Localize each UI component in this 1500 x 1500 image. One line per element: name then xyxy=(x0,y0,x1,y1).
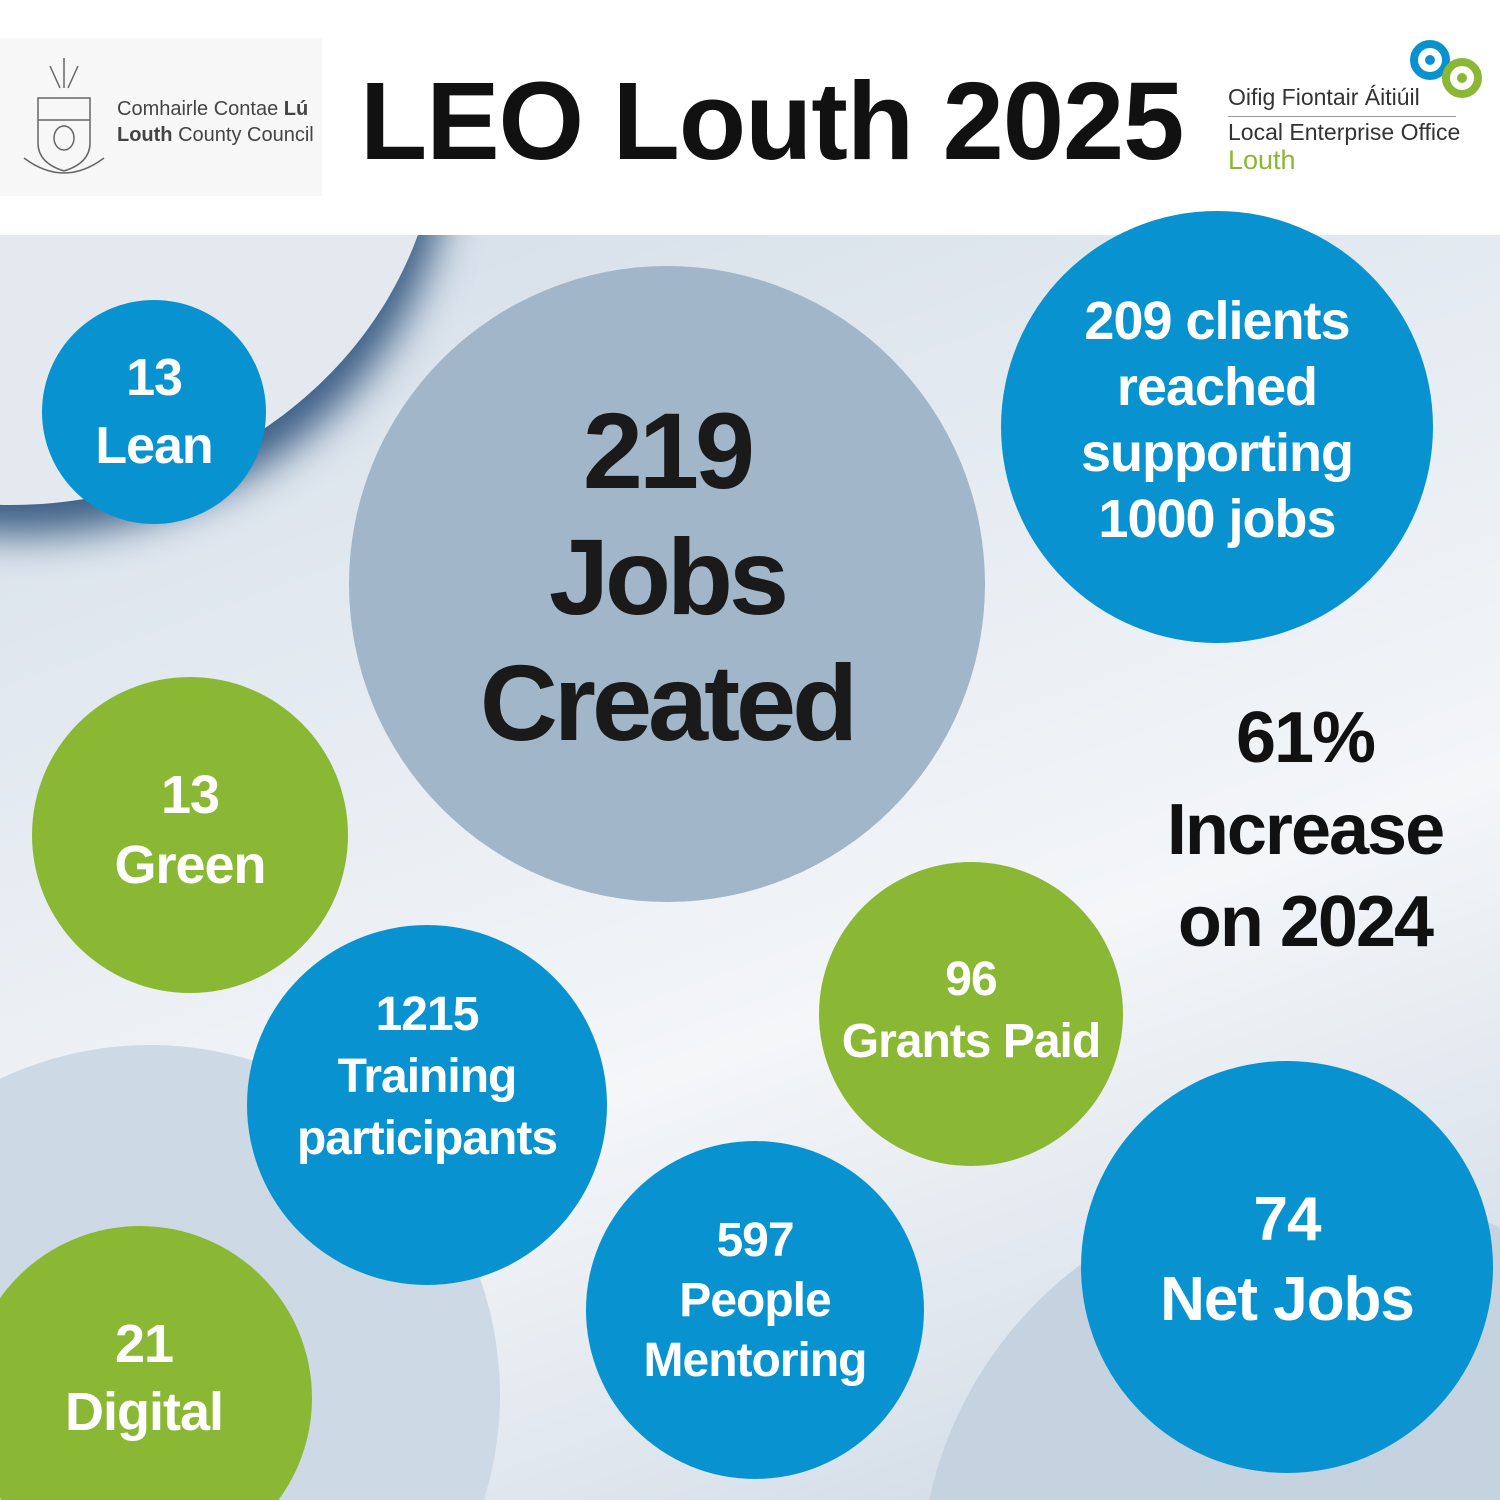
icon: LEO rings xyxy=(1410,40,1482,98)
circle: 1215 Training: Training xyxy=(338,1050,516,1103)
logo: Louth County Council: Comhairle Contae Lú xyxy=(117,98,308,120)
logo: Local Enterprise Office Louth: Local Enterprise Office xyxy=(1228,119,1460,145)
circle: 597 People Mentoring xyxy=(586,1141,924,1479)
logo: Local Enterprise Office Louth xyxy=(1228,40,1482,175)
circle: 74 Net Jobs: Net Jobs xyxy=(1160,1265,1414,1334)
circle: 13 Green: 13 xyxy=(161,765,219,825)
text: 61% increase: on 2024 xyxy=(1178,882,1432,962)
circle: 74 Net Jobs xyxy=(1081,1061,1493,1473)
circle: 219 Jobs Created: Created xyxy=(480,642,854,763)
logo: Local Enterprise Office Louth: Oifig Fiontair Áitiúil xyxy=(1228,84,1420,110)
circle: 21 Digital: Digital xyxy=(65,1382,223,1442)
circle: 21 Digital: 21 xyxy=(115,1314,173,1374)
circle: 1215 Training: 1215 xyxy=(376,988,478,1041)
circle: 209 clients: reached xyxy=(1117,357,1317,417)
circle: 219 Jobs Created xyxy=(349,266,985,902)
circle: 74 Net Jobs: 74 xyxy=(1254,1185,1320,1254)
circle: 13 Green: Green xyxy=(114,835,266,895)
circle: 209 clients: supporting xyxy=(1081,423,1353,483)
circle: 13 Lean: Lean xyxy=(95,417,213,475)
circle: 13 Green xyxy=(32,677,348,993)
circle: 219 Jobs Created: 219 xyxy=(583,390,751,511)
logo: Louth County Council xyxy=(0,38,322,196)
icon: crest xyxy=(24,58,104,174)
text: 61% increase xyxy=(1167,698,1443,962)
text: 61% increase: 61% xyxy=(1236,698,1374,778)
circle: 209 clients: 209 clients xyxy=(1084,291,1350,351)
circle: 597 People Mentoring: 597 xyxy=(716,1214,794,1267)
logo: Local Enterprise Office Louth: Louth xyxy=(1228,145,1296,175)
logo: Louth County Council: Louth County Council xyxy=(117,124,314,146)
title: LEO Louth 2025 xyxy=(360,60,1183,183)
circle: 96 Grants Paid: 96 xyxy=(945,953,997,1006)
circle: 96 Grants Paid xyxy=(819,862,1123,1166)
circle: 209 clients: 1000 jobs xyxy=(1098,489,1336,549)
circle: 597 People Mentoring: Mentoring xyxy=(644,1334,866,1387)
circle: 597 People Mentoring: People xyxy=(679,1274,831,1327)
circle: 1215 Training xyxy=(247,925,607,1285)
text: 61% increase: Increase xyxy=(1167,790,1443,870)
circle: 1215 Training: participants xyxy=(297,1112,557,1165)
circle: 13 Lean: 13 xyxy=(126,349,182,407)
circle: 13 Lean xyxy=(42,300,266,524)
circle: 219 Jobs Created: Jobs xyxy=(549,516,785,637)
circle: 21 Digital xyxy=(0,1226,312,1500)
circle: 96 Grants Paid: Grants Paid xyxy=(842,1015,1100,1068)
circle: 209 clients xyxy=(1001,211,1433,643)
